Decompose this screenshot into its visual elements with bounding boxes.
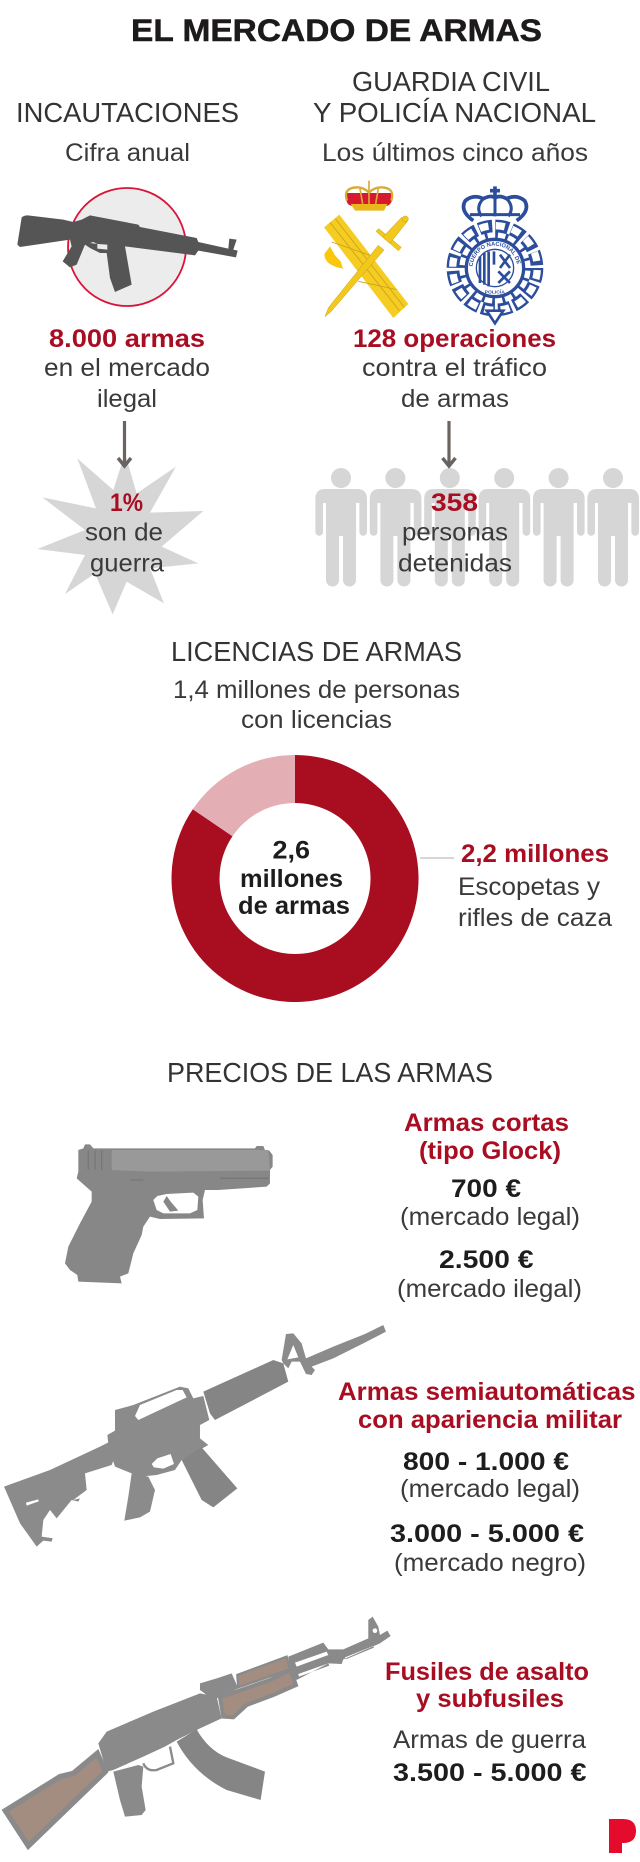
stat: 8.000 armas: en el mercado — [44, 354, 210, 382]
panel: precios de las armas — [4, 1057, 636, 1846]
stat: 128 operaciones: de armas — [401, 385, 509, 413]
stat: 8.000 armas: 8.000 armas — [49, 325, 205, 353]
callout: 2,2 millones: Escopetas y — [458, 873, 601, 901]
image: semiautomatic rifle — [4, 1325, 386, 1547]
title: EL MERCADO DE ARMAS — [131, 12, 542, 48]
callout: 2,2 millones — [458, 840, 612, 932]
icon: guardia civil emblem — [324, 181, 408, 318]
stat: 1% son de guerra — [85, 489, 164, 578]
star — [453, 226, 537, 323]
stat: 128 operaciones — [353, 325, 556, 413]
text: armas semiautomaticas: (mercado legal) — [400, 1475, 580, 1503]
image: pistol — [65, 1144, 273, 1283]
text: armas cortas: (mercado ilegal) — [397, 1275, 582, 1303]
donut center label — [238, 836, 350, 920]
text: armas cortas: Armas cortas — [404, 1109, 569, 1137]
heading: guardia civil y policia nacional — [313, 66, 596, 128]
donut center label: de armas — [238, 892, 350, 920]
icon: rifle in circle — [17, 188, 238, 306]
stat: 128 operaciones: 128 operaciones — [353, 325, 556, 353]
text: armas cortas: (tipo Glock) — [419, 1137, 561, 1165]
sword — [325, 216, 408, 317]
icon: six people — [315, 468, 639, 586]
icon: policia nacional emblem — [446, 186, 544, 326]
donut center label: 2,6 — [272, 836, 310, 864]
subheading: personas con licencias: 1,4 millones de personas — [173, 676, 460, 704]
text: armas semiautomaticas: con apariencia militar — [358, 1406, 622, 1434]
text: armas cortas: 700 € — [451, 1175, 521, 1203]
heading: precios de las armas: PRECIOS DE LAS ARMAS — [167, 1057, 493, 1088]
stat: 358 personas detenidas: personas — [402, 518, 508, 546]
stat: 128 operaciones: contra el tráfico — [362, 354, 547, 382]
heading: guardia civil y policia nacional: Y POLICÍA NACIONAL — [313, 97, 596, 128]
text: armas semiautomaticas: (mercado negro) — [394, 1549, 586, 1577]
heading: guardia civil y policia nacional: GUARDIA CIVIL — [352, 66, 550, 97]
subheading: cifra anual: Cifra anual — [65, 139, 190, 167]
crown — [464, 186, 526, 221]
heading: incautaciones: INCAUTACIONES — [16, 97, 239, 128]
subheading: ultimos cinco anos: Los últimos cinco años — [322, 139, 588, 167]
callout: 2,2 millones: 2,2 millones — [461, 840, 609, 868]
motto: CUERPO NACIONAL DE — [469, 242, 521, 266]
stat: 8.000 armas — [44, 325, 210, 413]
text: armas semiautomaticas — [338, 1378, 636, 1577]
stat: 358 personas detenidas: detenidas — [398, 550, 512, 578]
panel: incautaciones — [16, 97, 239, 614]
logo: P — [609, 1819, 636, 1853]
text: armas cortas: 2.500 € — [439, 1246, 534, 1274]
stat: 1% son de guerra: son de — [85, 518, 163, 546]
text: fusiles de asalto — [385, 1658, 589, 1787]
panel: licencias de armas — [171, 636, 612, 1002]
shield — [480, 251, 510, 286]
text: fusiles de asalto: Armas de guerra — [393, 1726, 586, 1754]
stat: 1% son de guerra: guerra — [90, 550, 164, 578]
text: fusiles de asalto: y subfusiles — [416, 1685, 564, 1713]
crown — [346, 181, 392, 211]
leader line — [420, 857, 454, 859]
subheading: personas con licencias — [173, 676, 460, 734]
callout: 2,2 millones: rifles de caza — [458, 904, 612, 932]
stat: 1% son de guerra: 1% — [110, 489, 143, 517]
text: armas semiautomaticas: 3.000 - 5.000 € — [390, 1520, 584, 1548]
motto — [469, 242, 521, 295]
text: fusiles de asalto: 3.500 - 5.000 € — [393, 1759, 587, 1787]
donut chart — [172, 755, 419, 1002]
axe — [324, 246, 343, 269]
arrow — [442, 421, 456, 466]
heading: licencias de armas: LICENCIAS DE ARMAS — [171, 636, 462, 667]
donut center label: millones — [240, 865, 343, 893]
text: armas cortas: (mercado legal) — [400, 1203, 580, 1231]
stat: 8.000 armas: ilegal — [97, 385, 157, 413]
stat: 358 personas detenidas — [398, 489, 512, 578]
fasces — [324, 215, 408, 318]
icon: starburst — [37, 453, 203, 614]
text: armas cortas — [397, 1109, 582, 1303]
stat: 358 personas detenidas: 358 — [431, 489, 478, 517]
motto: POLICÍA — [485, 287, 505, 295]
text: armas semiautomaticas: 800 - 1.000 € — [403, 1448, 569, 1476]
text: fusiles de asalto: Fusiles de asalto — [385, 1658, 589, 1686]
subheading: personas con licencias: con licencias — [241, 706, 392, 734]
arrow — [118, 421, 131, 466]
panel: guardia civil y policia nacional — [313, 66, 639, 586]
image: assault rifle — [5, 1617, 391, 1846]
text: armas semiautomaticas: Armas semiautomáticas — [338, 1378, 636, 1406]
